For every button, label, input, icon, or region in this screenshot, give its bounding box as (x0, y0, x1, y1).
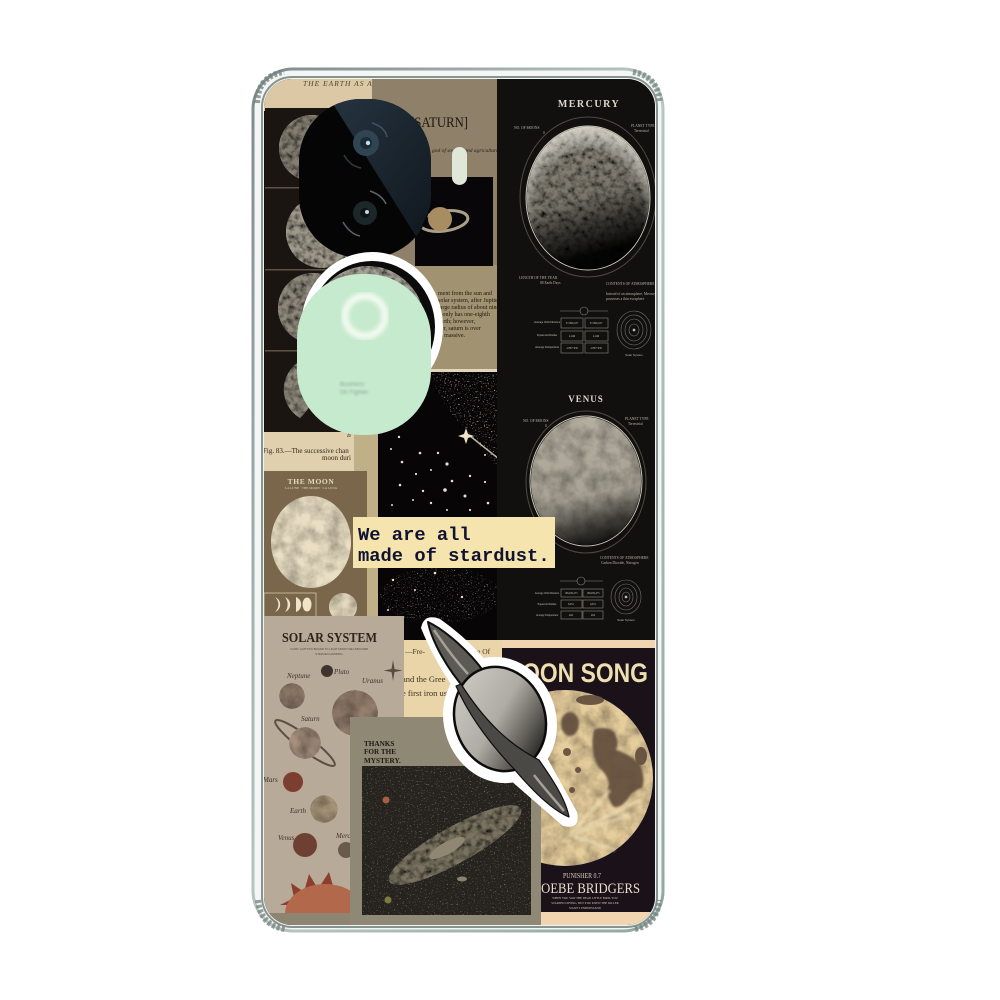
planet stat labels: NO. OF MOONS (523, 419, 548, 423)
bottom strip (262, 913, 362, 925)
panel: mercury: -180/+430 (566, 347, 578, 350)
planet stat labels: Instead of an atmosphere, Mercury (606, 292, 656, 297)
mercury (338, 842, 354, 858)
transparent case frame (253, 69, 663, 931)
solar system diagram (611, 580, 641, 614)
panel: moon phases (265, 108, 348, 418)
planet labels: Venus (278, 834, 295, 842)
planet labels: Saturn (301, 715, 320, 723)
planet stat labels: 0 (543, 131, 545, 135)
planet stat labels (523, 417, 649, 566)
caption: lyric (551, 896, 619, 910)
lens glass highlight (330, 99, 431, 238)
panel: venus: Equatorial Radius (538, 603, 556, 606)
heading: mercury: MERCURY (558, 99, 620, 110)
caption: punisher: PUNISHER 0.7 (563, 872, 601, 880)
panel: the moon chart (262, 471, 378, 621)
image: saturn photo (415, 177, 493, 266)
quote label: made of stardust. (358, 545, 550, 567)
panel: mercury: 2,440 (593, 335, 600, 338)
moon disc (271, 496, 351, 588)
ring front highlight (534, 775, 564, 811)
small print: Business (340, 382, 364, 388)
planet stat labels: CONTENTS OF ATMOSPHERE (600, 556, 649, 560)
panel: mercury: 57,909,227 (566, 322, 579, 325)
text block: saturn description: large radius of about nine (438, 304, 500, 311)
heading: the moon: THE MOON (288, 477, 334, 486)
galaxy image (362, 766, 531, 915)
panel: venus: 6,051 (590, 603, 597, 606)
green button: On Fighter (340, 390, 368, 396)
panel: moon song poster (502, 640, 655, 925)
saturn sticker (421, 617, 578, 827)
quote label (353, 517, 555, 568)
panel: venus: 6,051 (568, 603, 575, 606)
planet stat labels: Terrestrial (634, 129, 649, 133)
panel: earth page header (264, 79, 374, 111)
panel: mercury: Average Temperature (535, 346, 560, 349)
saturn body (440, 654, 560, 784)
saturn ring back (428, 622, 484, 690)
panel: figure caption: Fig. 83.—The successive chan (263, 447, 349, 455)
data table (560, 307, 608, 353)
planet: mercury (520, 117, 656, 277)
sun illustration (280, 872, 365, 944)
panel: solar system chart (262, 616, 404, 944)
moon phase 2 (286, 204, 348, 268)
moon phase 3 (278, 273, 322, 340)
planet labels: Uranus (362, 677, 383, 685)
pluto (321, 665, 333, 677)
saturn ring front (456, 684, 569, 817)
venus (293, 833, 317, 857)
phone case collage (252, 68, 664, 932)
heading: thanks: FOR THE (364, 748, 396, 756)
planet stat labels: Carbon Dioxide, Nitrogen (601, 561, 639, 566)
planet stat labels: LENGTH OF THE YEAR (519, 276, 558, 280)
panel: saturn page: god of sowing and agriculture (432, 147, 499, 154)
moon rays (570, 790, 640, 850)
mars (283, 772, 303, 792)
planet stat labels: NO. OF MOONS (514, 126, 539, 130)
panel: saturn page (372, 79, 500, 372)
planet labels: Pluto (333, 668, 350, 676)
collage artwork (262, 79, 656, 944)
neptune (279, 683, 305, 709)
panel: mercury: 57,909,227 (590, 322, 603, 325)
text block: saturn description: ment from the sun and (438, 290, 492, 297)
panel: venus: Solar System (617, 618, 635, 622)
shooting star (470, 436, 497, 458)
panel: quoted page: and the Gree (402, 674, 446, 684)
ring highlight (434, 630, 468, 674)
earth (310, 795, 338, 823)
panel: venus: Average Temperature (536, 614, 559, 617)
panel: figure caption: moon duri (322, 454, 351, 462)
heading: saturn: [SATURN] (410, 115, 468, 131)
solar system diagram (617, 311, 651, 349)
heading: solar system: SOLAR SYSTEM (282, 631, 377, 646)
moon phase 4 (284, 364, 309, 418)
panel: quoted page: —Fre- (404, 647, 425, 656)
planet stat labels: PLANET TYPE (625, 417, 649, 421)
saturn (271, 715, 339, 771)
panel: solar system chart: STEPHEN HAWKING (315, 652, 343, 656)
planet stat labels: Terrestrial (628, 422, 643, 426)
small moon (329, 593, 357, 616)
ring mount behind button (301, 252, 443, 402)
planet stat labels: possesses a thin exosphere (606, 297, 645, 301)
panel: mercury: Average Orbit Distance (534, 321, 561, 324)
planet: venus (526, 411, 646, 553)
heading: thanks: THANKS (364, 740, 394, 748)
corner bumpers (257, 72, 660, 929)
green button (297, 274, 431, 435)
panel: solar system chart: I CANT. A MYSTIC BOUND TO LIGHT FROM THE UNKNOWN (290, 647, 368, 651)
data table (560, 577, 603, 619)
heading: thanks (364, 740, 401, 765)
panel: mercury: -180/+430 (590, 347, 602, 350)
sticker outline (421, 617, 578, 827)
panel: mercury: Solar System (625, 353, 643, 357)
panel: figure caption: B (347, 433, 351, 439)
panel: the moon chart: LA LUNE · THE MOON · LA LUNA (285, 486, 338, 490)
glow ring (345, 296, 385, 336)
panel: mercury: 2,440 (569, 335, 576, 338)
planet stat labels: 88 Earth Days (540, 281, 561, 285)
panel: mercury and venus chart background (497, 79, 655, 640)
uranus (332, 690, 378, 736)
panel: venus: 464 (591, 614, 596, 617)
caption: lyric: STARTED CRYING, BUT YOU KNEW THE KILLER (551, 901, 619, 906)
moon illustration (541, 690, 653, 866)
panel: quoted page: e first iron us (402, 688, 447, 698)
planet labels: Neptune (286, 672, 310, 680)
caption: lyric: WASN'T UNDERSTAND (569, 906, 602, 910)
panel: mercury: Equatorial Radius (537, 334, 557, 337)
text block: saturn description: solar system, after Jupiter (438, 297, 500, 304)
planet stat labels: 0 (545, 424, 547, 428)
heading: venus: VENUS (568, 394, 604, 404)
panel: mercury (514, 99, 656, 357)
text block: saturn description (438, 290, 500, 339)
panel: star field (378, 372, 504, 642)
panel: figure caption (263, 432, 378, 472)
heading: moon song: MOON SONG (503, 658, 648, 688)
flash pill (452, 147, 467, 185)
caption: phoebe bridgers: PHOEBE BRIDGERS (525, 881, 640, 897)
camera island (299, 99, 431, 258)
panel: venus (523, 394, 649, 622)
moon maria (561, 695, 647, 807)
planet labels: Mars (262, 776, 278, 784)
caption: lyric: WHEN YOU SAW THE DEAD LITTLE BIRD, YOU (552, 896, 619, 901)
text block: saturn description: earth; however, (438, 319, 476, 325)
panel: venus: 108,209,475 (587, 592, 600, 595)
text block: saturn description: ver, saturn is over (438, 326, 481, 332)
panel: thanks for the mystery (350, 717, 541, 925)
panel: venus: 464 (569, 614, 574, 617)
text block: saturn description: re massive. (438, 333, 465, 339)
planet stat labels: CONTENTS OF ATMOSPHERE (606, 282, 655, 286)
quote label: We are all (358, 524, 471, 546)
text block: saturn description: h only has one-eighth (438, 312, 490, 318)
planet stat labels (514, 124, 656, 301)
heading: thanks: MYSTERY. (364, 757, 401, 765)
panel: quoted page: e Of (477, 647, 491, 656)
panel: venus: Average Orbit Distance (535, 592, 560, 595)
moon phase 1 (279, 115, 319, 178)
planet stat labels: PLANET TYPE (631, 124, 655, 128)
planet labels: Earth (289, 807, 306, 815)
planet labels: Merc (335, 832, 351, 840)
lens lower (343, 191, 386, 236)
panel: earth page header: THE EARTH AS A (303, 79, 373, 88)
lens upper (344, 123, 387, 168)
planet labels (262, 668, 383, 842)
panel: venus: 108,209,475 (565, 592, 578, 595)
panel: quoted page (402, 640, 502, 718)
moon phases box (264, 593, 316, 617)
star ornament (384, 660, 402, 681)
